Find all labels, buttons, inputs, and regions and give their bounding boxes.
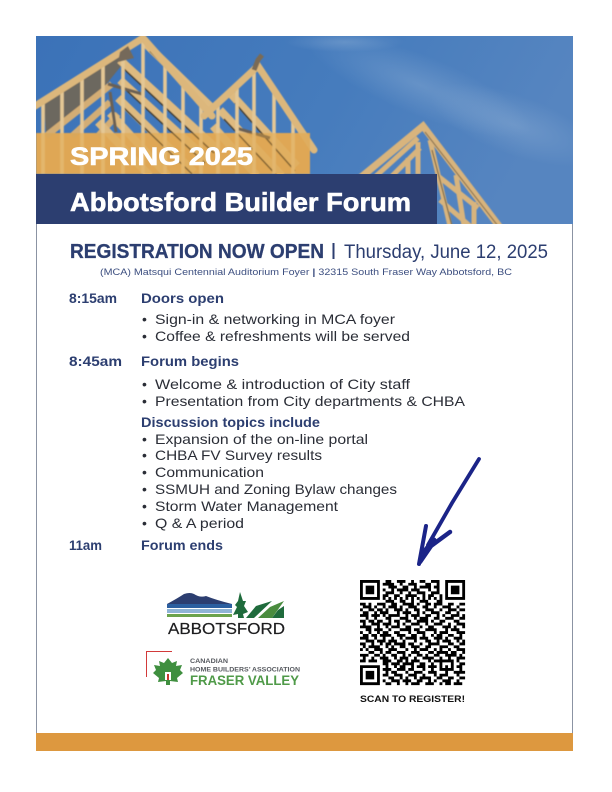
discussion topics: • bbox=[142, 447, 147, 463]
schedule: forum begins: Presentation from City departments & CHBA bbox=[155, 393, 466, 409]
title: Abbotsford Builder Forum bbox=[70, 187, 411, 217]
page border bbox=[36, 36, 572, 750]
icon: hand-drawn arrow bbox=[419, 459, 479, 564]
schedule: doors open: • bbox=[142, 311, 147, 327]
registration heading: Thursday, June 12, 2025 bbox=[344, 242, 548, 263]
schedule: doors open: Coffee & refreshments will be served bbox=[155, 328, 410, 344]
studs bbox=[43, 38, 293, 174]
discussion topics: • bbox=[142, 498, 147, 514]
discussion topics bbox=[141, 415, 397, 531]
discussion topics: Q & A period bbox=[155, 515, 244, 531]
logo: Canadian Home Builders' Association Fraser Valley: FRASER VALLEY bbox=[190, 673, 299, 688]
schedule: forum begins: Welcome & introduction of City staff bbox=[155, 376, 410, 392]
discussion topics: Communication bbox=[155, 464, 264, 480]
logo: City of Abbotsford bbox=[167, 592, 285, 638]
schedule: forum begins: 8:45am bbox=[69, 354, 122, 369]
discussion topics: CHBA FV Survey results bbox=[155, 447, 322, 463]
discussion topics: • bbox=[142, 481, 147, 497]
discussion topics: Discussion topics include bbox=[141, 415, 321, 430]
lower wall bbox=[36, 133, 310, 174]
dark sheathing bbox=[44, 57, 122, 132]
header photo: roof trusses against sky bbox=[36, 36, 573, 224]
schedule: forum begins: Forum begins bbox=[141, 354, 239, 369]
orange translucent overlay bbox=[36, 133, 310, 174]
schedule: doors open: 8:15am bbox=[69, 291, 117, 306]
schedule: forum ends bbox=[69, 538, 223, 553]
title banner bbox=[36, 174, 437, 224]
schedule: doors open: • bbox=[142, 328, 147, 344]
logo: Canadian Home Builders' Association Fraser Valley: CANADIAN bbox=[190, 658, 228, 665]
QR caption: SCAN TO REGISTER! bbox=[360, 694, 465, 704]
rafters bbox=[32, 38, 314, 150]
logo: Canadian Home Builders' Association Fraser Valley bbox=[146, 652, 300, 688]
schedule: doors open: Doors open bbox=[141, 291, 224, 306]
right truss bbox=[360, 126, 502, 230]
registration heading bbox=[70, 241, 548, 263]
schedule: forum ends: 11am bbox=[69, 538, 102, 553]
schedule: forum begins: • bbox=[142, 393, 147, 409]
lower wood webs under sheathing bbox=[46, 84, 118, 136]
discussion topics: • bbox=[142, 464, 147, 480]
schedule: doors open bbox=[69, 291, 410, 344]
logo: Canadian Home Builders' Association Fraser Valley: HOME BUILDERS’ ASSOCIATION bbox=[190, 666, 300, 674]
schedule: forum ends: Forum ends bbox=[141, 538, 223, 553]
schedule: forum begins bbox=[69, 354, 466, 409]
discussion topics: • bbox=[142, 431, 147, 447]
diagonal webs bbox=[98, 44, 297, 176]
discussion topics: Storm Water Management bbox=[155, 498, 338, 514]
QR code bbox=[360, 581, 465, 684]
discussion topics: • bbox=[142, 515, 147, 531]
discussion topics: SSMUH and Zoning Bylaw changes bbox=[155, 481, 397, 497]
footer bar bbox=[36, 733, 573, 751]
discussion topics: Expansion of the on-line portal bbox=[155, 431, 368, 447]
schedule: forum begins: • bbox=[142, 376, 147, 392]
schedule: doors open: Sign-in & networking in MCA foyer bbox=[155, 311, 395, 327]
venue address: (MCA) Matsqui Centennial Auditorium Foyer | 32315 South Fraser Way Abbotsford, BC bbox=[100, 267, 512, 278]
logo: City of Abbotsford: ABBOTSFORD bbox=[168, 621, 285, 638]
heading: SPRING 2025: SPRING 2025 bbox=[70, 143, 253, 171]
registration heading: REGISTRATION NOW OPEN bbox=[70, 241, 324, 263]
